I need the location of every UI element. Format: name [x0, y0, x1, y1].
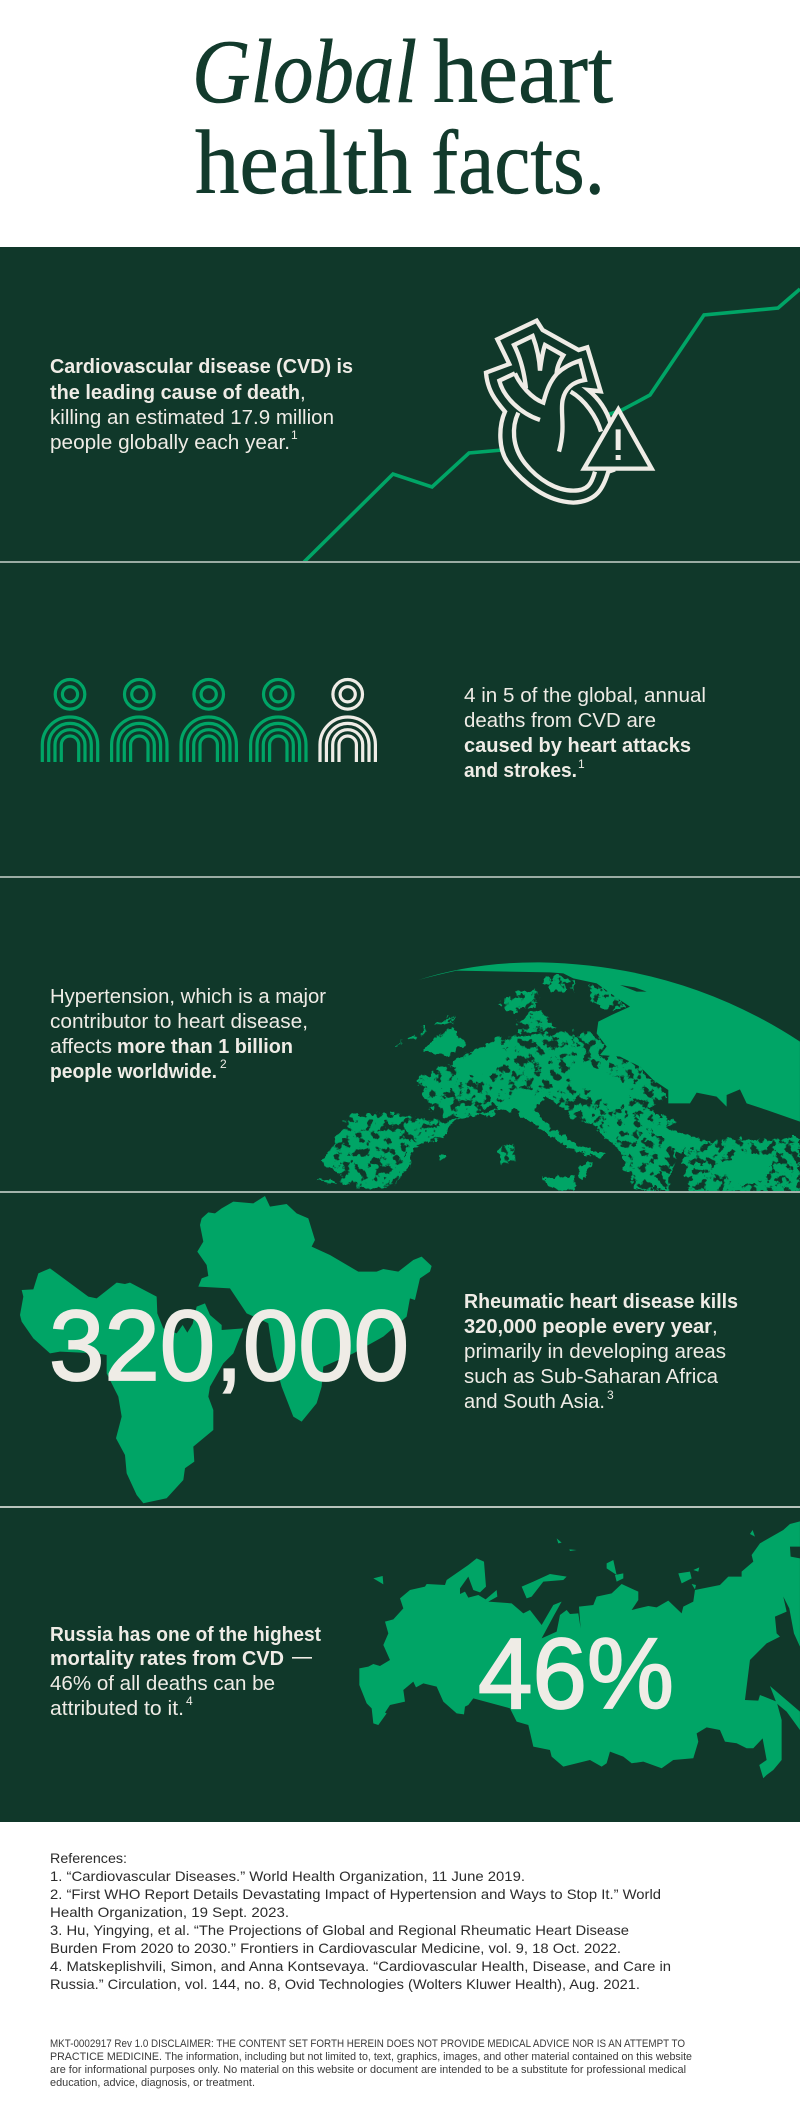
- panel 1 text: the leading cause of death: [50, 381, 300, 404]
- person 2: [112, 680, 167, 762]
- disclaimer: [50, 2038, 692, 2089]
- references: 1. “Cardiovascular Diseases.” World Health Organization, 11 June 2019.: [50, 1868, 525, 1884]
- dark background band: [0, 247, 800, 1822]
- panel 4 text: primarily in developing areas: [464, 1340, 726, 1363]
- disclaimer: education, advice, diagnosis, or treatment.: [50, 2077, 255, 2089]
- map: Russia: [359, 1521, 800, 1778]
- disclaimer: are for informational purposes only. No material on this website or document are intended to be a substitute for professional medical: [50, 2064, 686, 2076]
- person 3: [181, 680, 236, 762]
- panel 4 text: such as Sub-Saharan Africa: [464, 1365, 719, 1388]
- icon: row of five people: [42, 680, 375, 762]
- title: facts.: [431, 112, 605, 213]
- panel 1 text: killing an estimated 17.9 million: [50, 406, 334, 429]
- panel 1 text: people globally each year.: [50, 431, 290, 454]
- panel 2 text: [464, 684, 706, 782]
- big number 46%: 46%: [478, 1618, 674, 1730]
- references: 2. “First WHO Report Details Devastating Impact of Hypertension and Ways to Stop It.” World: [50, 1886, 661, 1902]
- panel 1 text: ,: [300, 381, 306, 404]
- panel 4 text: 320,000 people every year: [464, 1315, 712, 1338]
- arctic and Pacific islands: [373, 1530, 800, 1730]
- panel 1 text: Cardiovascular disease (CVD) is: [50, 355, 353, 378]
- solid eastern landmass: [418, 962, 800, 1122]
- panel 3 text: [50, 985, 326, 1083]
- person 4: [251, 680, 306, 762]
- disclaimer: PRACTICE MEDICINE. The information, including but not limited to, text, graphics, images, and other material contained on this website: [50, 2051, 692, 2063]
- panel 4 text: 3: [607, 1388, 614, 1402]
- Africa: [20, 1268, 243, 1503]
- panel 3 text: affects: [50, 1035, 112, 1058]
- references: 4. Matskeplishvili, Simon, and Anna Kontsevaya. “Cardiovascular Health, Disease, and Care in: [50, 1958, 671, 1974]
- panel 5 text: mortality rates from CVD: [50, 1647, 284, 1670]
- panel 4 text: Rheumatic heart disease kills: [464, 1290, 738, 1313]
- speckled land: [317, 975, 800, 1193]
- references: 3. Hu, Yingying, et al. “The Projections of Global and Regional Rheumatic Heart Disease: [50, 1922, 629, 1938]
- references: Burden From 2020 to 2030.” Frontiers in Cardiovascular Medicine, vol. 9, 18 Oct. 2022.: [50, 1940, 621, 1956]
- panel 2 text: 1: [578, 757, 585, 771]
- person 1: [42, 680, 98, 762]
- line chart trend: [304, 289, 800, 562]
- panel 4 text: ,: [712, 1315, 718, 1338]
- panel: 4 in 5 deaths: [42, 680, 706, 782]
- person 5 highlighted: [320, 680, 375, 762]
- divider: [0, 1191, 800, 1193]
- references: [50, 1850, 671, 1992]
- disclaimer: MKT-0002917 Rev 1.0 DISCLAIMER: THE CONTENT SET FORTH HEREIN DOES NOT PROVIDE MEDICAL ADVICE NOR IS AN ATTEMPT TO: [50, 2038, 685, 2050]
- panel: hypertension: [50, 962, 800, 1193]
- panel: rheumatic heart disease: [20, 1196, 738, 1503]
- divider: [0, 561, 800, 563]
- map: globe showing Europe: [317, 962, 800, 1193]
- panel: Russia: [50, 1521, 800, 1778]
- panel 5 text: [50, 1623, 321, 1720]
- panel 2 text: 4 in 5 of the global, annual: [464, 684, 706, 707]
- panel 2 text: deaths from CVD are: [464, 709, 656, 732]
- panel 1 text: [50, 355, 353, 454]
- panel 5 text: Russia has one of the highest: [50, 1623, 321, 1646]
- panel 1 text: 1: [291, 428, 298, 442]
- big number 320,000: 320,000: [49, 1290, 409, 1402]
- panel 3 text: people worldwide.: [50, 1060, 217, 1083]
- map: Africa and South Asia: [20, 1196, 432, 1503]
- divider: [0, 876, 800, 878]
- panel 3 text: Hypertension, which is a major: [50, 985, 326, 1008]
- panel 3 text: more than 1 billion: [117, 1035, 293, 1058]
- solid highlights over speckle: [397, 1027, 773, 1191]
- panel 4 text: [464, 1290, 738, 1413]
- title: [192, 21, 613, 213]
- panel 5 text: 46% of all deaths can be: [50, 1672, 275, 1695]
- panel 5 text: attributed to it.: [50, 1697, 184, 1720]
- panel 2 text: caused by heart attacks: [464, 734, 691, 757]
- references: Health Organization, 19 Sept. 2023.: [50, 1904, 289, 1920]
- panel: leading cause of death: [50, 289, 800, 562]
- icon: heart with warning triangle: [486, 321, 652, 503]
- panel 3 text: 2: [220, 1057, 227, 1071]
- South Asia: [197, 1196, 432, 1422]
- panel 4 text: and South Asia.: [464, 1390, 605, 1413]
- divider: [0, 1506, 800, 1508]
- references: Russia.” Circulation, vol. 144, no. 8, Ovid Technologies (Wolters Kluwer Health), Aug. 2021.: [50, 1976, 640, 1992]
- title: health: [195, 112, 412, 213]
- title: Global: [192, 21, 417, 122]
- title: heart: [433, 21, 613, 122]
- panel 2 text: and strokes.: [464, 759, 577, 782]
- panel 3 text: contributor to heart disease,: [50, 1010, 308, 1033]
- panel 5 text: 4: [186, 1694, 193, 1708]
- references: References:: [50, 1850, 127, 1866]
